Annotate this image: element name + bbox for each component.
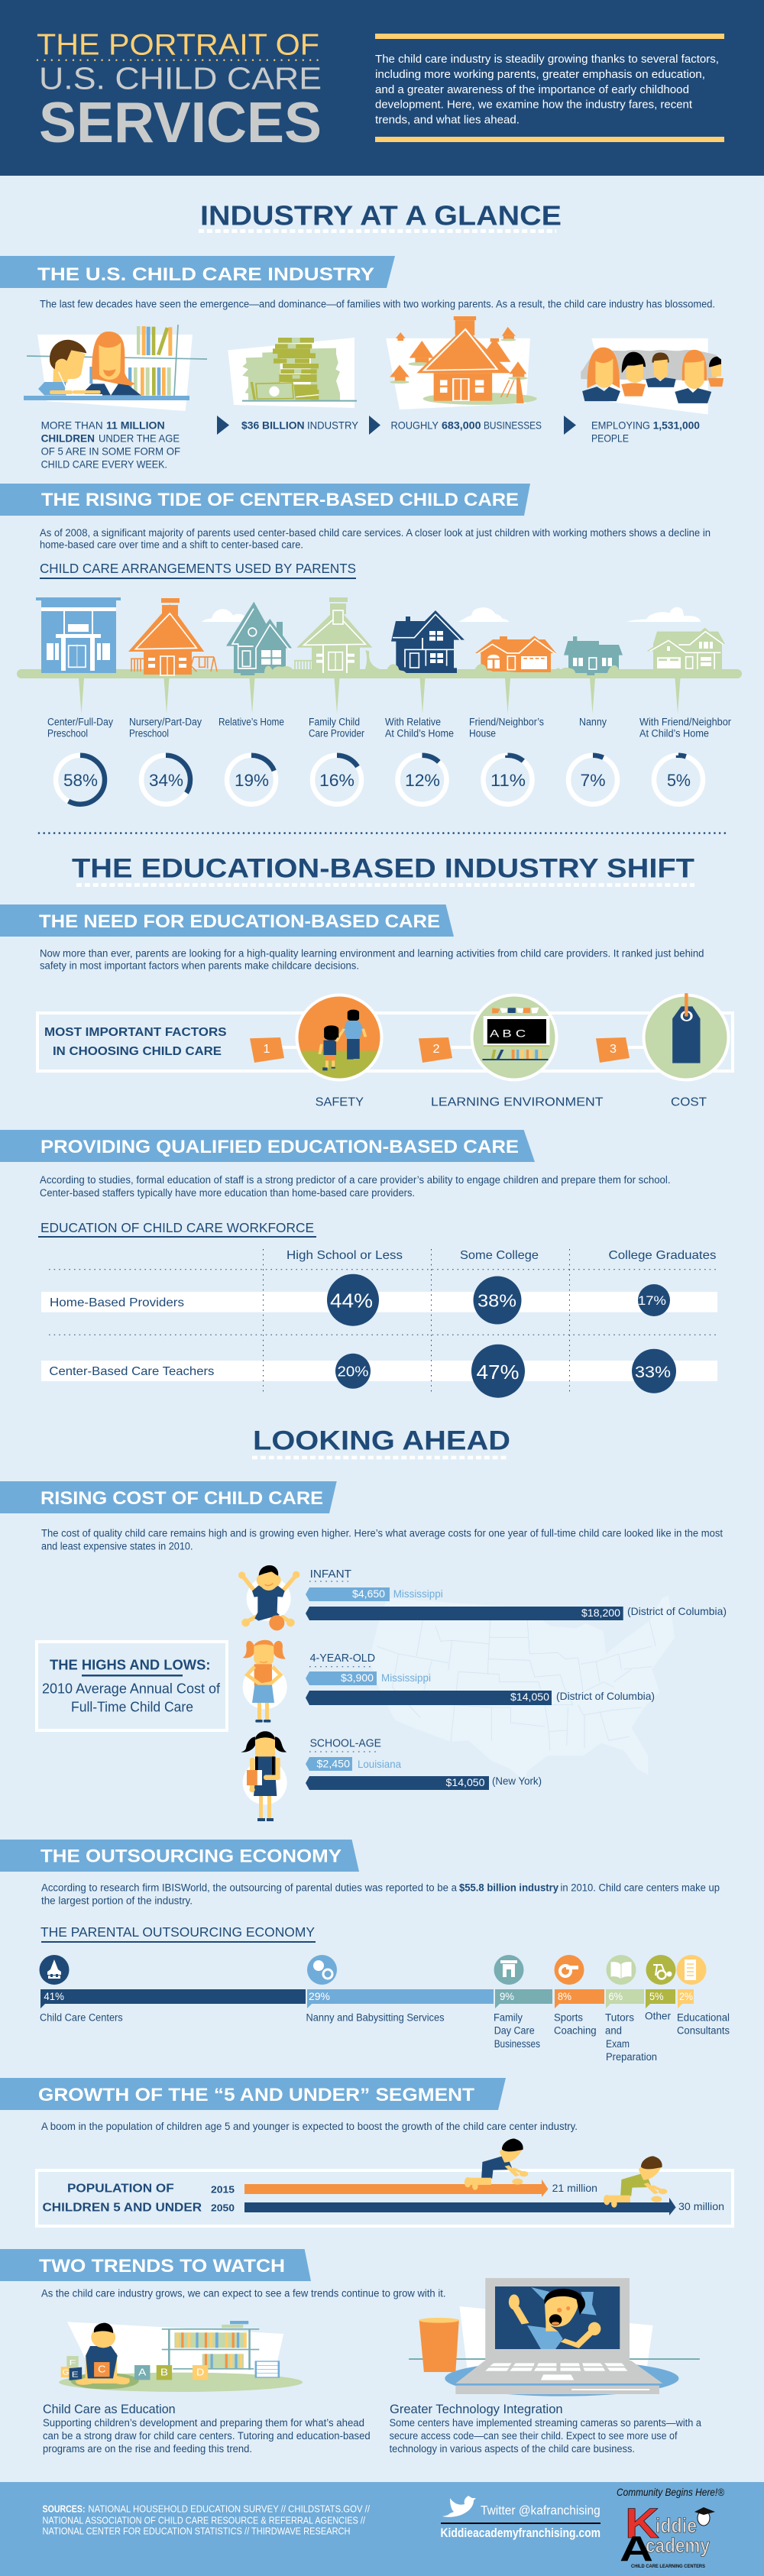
icon: pacifier	[307, 1955, 337, 1985]
illustration: child with blocks and shelf: B	[160, 2366, 168, 2377]
tag 1: 1	[263, 1043, 270, 1056]
segment labels: Consultants	[677, 2025, 730, 2037]
logo: Kiddie Academy: K	[625, 2499, 659, 2547]
arrow	[564, 416, 576, 435]
banner: the outsourcing economy: THE OUTSOURCING ECONOMY	[40, 1846, 342, 1867]
stat: 683,000 businesses	[391, 419, 542, 431]
column headers: High School or Less	[286, 1249, 403, 1262]
category labels: With Friend/Neighbor	[639, 717, 731, 727]
intro text: the largest portion of the industry.	[41, 1895, 193, 1907]
house: nursery	[128, 598, 217, 675]
chart: 4-year-old cost: (District of Columbia)	[556, 1690, 655, 1702]
segment values	[44, 1991, 693, 2002]
icon: four-year-old	[242, 1640, 287, 1723]
factor labels: LEARNING ENVIRONMENT	[431, 1096, 604, 1109]
intro text: According to studies, formal education of staff is a strong predictor of a care provider’s ability to engage children and prepare them for school.	[40, 1174, 671, 1186]
segment values: 29%	[309, 1991, 330, 2002]
banner: the outsourcing economy	[0, 1840, 359, 1872]
chart: infant cost: (District of Columbia)	[627, 1605, 727, 1617]
panel: most important factors	[37, 993, 733, 1089]
bubble values: 47%	[477, 1361, 520, 1383]
tag 2	[419, 1037, 452, 1063]
table: education of workforce	[41, 1249, 717, 1398]
ground	[17, 669, 742, 678]
segment labels: Day Care	[494, 2025, 535, 2037]
chart: 4-year-old cost: 4-YEAR-OLD	[310, 1652, 375, 1665]
illustration: child with blocks and shelf: G	[63, 2368, 70, 2377]
segment labels: Coaching	[554, 2025, 597, 2037]
segment labels: Nanny and Babysitting Services	[306, 2012, 445, 2024]
intro text: $55.8 billion industry	[459, 1882, 558, 1894]
stat: 36 billion industry	[241, 419, 359, 431]
tag 2: 2	[432, 1043, 440, 1056]
banner: two trends	[0, 2249, 311, 2281]
category icons	[40, 1955, 706, 1985]
icon: crawling child olive	[604, 2156, 667, 2208]
stat: 683,000 businesses: BUSINESSES	[484, 419, 542, 431]
segment values: 9%	[500, 1991, 514, 2002]
intro text: safety in most important factors when parents make childcare decisions.	[40, 960, 359, 972]
column headers: Some College	[460, 1249, 539, 1262]
stat: 1,531,000 people	[591, 419, 700, 445]
house: friend at child's home	[647, 628, 725, 669]
column headers: College Graduates	[608, 1249, 717, 1262]
section heading: industry at a glance: INDUSTRY AT A GLANCE	[200, 200, 562, 231]
house: with relative	[387, 610, 465, 673]
stat: 1,531,000 people: PEOPLE	[591, 432, 629, 445]
segment labels: Exam	[606, 2038, 630, 2050]
row labels	[49, 1296, 214, 1378]
banner: growth of 5 and under	[0, 2078, 506, 2110]
illustration: group of employees	[581, 338, 724, 415]
category labels: Preschool	[129, 727, 169, 739]
subheading: EDUCATION OF CHILD CARE WORKFORCE	[40, 1220, 314, 1235]
logo: Kiddie Academy	[617, 2486, 725, 2569]
callout: highs and lows	[37, 1642, 227, 1730]
sources: SOURCES:	[43, 2503, 86, 2515]
segment labels: Family	[494, 2012, 523, 2024]
icon: tricycle	[646, 1955, 675, 1985]
factor 2: learning environment: A B C	[490, 1027, 526, 1039]
intro text: A boom in the population of children age 5 and younger is expected to boost the growth of the child care center industry.	[41, 2121, 578, 2132]
bar 2015: 2015	[211, 2184, 235, 2196]
panel heading: IN CHOOSING CHILD CARE	[53, 1045, 222, 1058]
chart: school-age cost: $2,450	[316, 1757, 350, 1769]
house: center/preschool	[36, 597, 121, 673]
spikes	[79, 678, 680, 714]
illustration: child with blocks and shelf	[59, 2321, 303, 2392]
bar 2050: 2050	[211, 2202, 235, 2214]
factor labels	[316, 1096, 707, 1109]
segment labels	[40, 2011, 730, 2063]
percentages: 5%	[667, 771, 691, 790]
segment labels: Tutors	[605, 2012, 634, 2024]
panel: population chart	[37, 2138, 733, 2226]
trend: child care as education: Supporting children’s development and preparing them for what’s ahead	[43, 2417, 364, 2429]
category labels: Care Provider	[309, 727, 364, 739]
sources	[43, 2503, 370, 2537]
factor 1: safety	[250, 993, 384, 1082]
chart: school-age cost: SCHOOL-AGE	[310, 1737, 381, 1750]
bar 2050	[211, 2198, 724, 2215]
banner: the U.S. child care industry: THE U.S. CHILD CARE INDUSTRY	[37, 264, 374, 285]
category labels: Nursery/Part-Day	[129, 717, 202, 727]
stat: 1,531,000 people: EMPLOYING	[591, 419, 650, 431]
trend: child care as education: programs are on the rise and feeding this trend.	[43, 2443, 252, 2455]
trend: greater technology integration: Some centers have implemented streaming cameras so parents—with a	[390, 2417, 701, 2429]
intro text block: development. Here, we examine how the industry fares, recent	[375, 98, 693, 112]
contact links	[440, 2503, 601, 2540]
icon: day care building	[494, 1955, 524, 1985]
header panel	[0, 0, 764, 176]
chart: infant cost	[306, 1568, 727, 1620]
category labels: Relative’s Home	[219, 717, 284, 727]
icon: school-age child	[241, 1731, 287, 1818]
factor labels: COST	[671, 1096, 707, 1109]
intro text	[40, 948, 704, 972]
bar segments	[40, 1989, 694, 2008]
tag 3: 3	[610, 1043, 617, 1056]
intro text	[40, 1174, 671, 1199]
banner: the need for education-based care: THE NEED FOR EDUCATION-BASED CARE	[39, 911, 440, 932]
illustration: child with blocks and shelf: F	[70, 2359, 76, 2367]
category labels: Family Child	[309, 717, 360, 727]
intro text: According to research firm IBISWorld, the outsourcing of parental duties was reported to be a	[41, 1882, 457, 1894]
intro text block	[375, 34, 724, 142]
intro text: As the child care industry grows, we can expect to see a few trends continue to grow with it.	[41, 2288, 446, 2299]
logo: Kiddie Academy: Community Begins Here!®	[617, 2486, 725, 2498]
banner: providing qualified care	[0, 1130, 535, 1162]
intro text block: and a greater awareness of the importance of early childhood	[375, 83, 689, 96]
factor 3: cost	[596, 993, 730, 1082]
banner: rising cost: RISING COST OF CHILD CARE	[40, 1488, 323, 1509]
banner: rising cost	[0, 1481, 337, 1513]
sources: NATIONAL CENTER FOR EDUCATION STATISTICS // THIRDWAVE RESEARCH	[43, 2526, 350, 2537]
percentages: 19%	[235, 771, 269, 790]
house: family provider	[294, 597, 382, 673]
stat: 11 million children: MORE THAN	[41, 419, 103, 431]
chart: school-age cost: (New York)	[492, 1775, 542, 1787]
callout: highs and lows: 2010 Average Annual Cost of	[42, 1681, 221, 1697]
segment labels: Educational	[677, 2012, 730, 2024]
stat: 11 million children: OF 5 ARE IN SOME FORM OF	[41, 445, 180, 457]
chart: infant cost: $4,650	[352, 1587, 385, 1600]
category labels: At Child’s Home	[639, 727, 709, 739]
segment values: 6%	[608, 1991, 623, 2002]
title: THE PORTRAIT OF	[37, 29, 319, 61]
intro text: The last few decades have seen the emergence—and dominance—of families with two working parents. As a result, the child care industry has blossomed.	[40, 298, 715, 310]
bubble values: 17%	[638, 1294, 666, 1308]
bubble values: 20%	[338, 1364, 368, 1380]
donut charts	[56, 756, 703, 804]
shoes of school-age child	[257, 1818, 274, 1821]
illustration: child with blocks and shelf: E	[72, 2371, 79, 2379]
percentages: 34%	[149, 771, 183, 790]
category labels: Nanny	[579, 717, 607, 727]
stat: 36 billion industry: INDUSTRY	[307, 419, 359, 431]
stat: 683,000 businesses: ROUGHLY	[391, 419, 439, 431]
intro text: Now more than ever, parents are looking for a high-quality learning environment and learning activities from child care providers. It ranked just behind	[40, 948, 704, 960]
banner: the rising tide: THE RISING TIDE OF CENTER-BASED CHILD CARE	[41, 490, 519, 510]
bar 2015: 21 million	[552, 2182, 597, 2194]
intro text	[40, 527, 711, 550]
illustration: child with blocks and shelf: C	[98, 2363, 105, 2374]
houses left	[36, 597, 382, 675]
house: relative's home	[226, 602, 294, 675]
bubble values: 33%	[635, 1364, 671, 1381]
segment labels: and	[605, 2025, 622, 2037]
chart: parental outsourcing economy	[40, 1955, 730, 2063]
sources: NATIONAL ASSOCIATION OF CHILD CARE RESOURCE & REFERRAL AGENCIES //	[43, 2515, 365, 2526]
segment values: 41%	[44, 1991, 64, 2002]
intro text	[41, 1528, 723, 1552]
map: United States background	[369, 1595, 675, 1782]
intro text: As of 2008, a significant majority of parents used center-based child care services. A closer look at just children with working mothers shows a decline in	[40, 527, 711, 539]
percentages: 58%	[63, 771, 98, 790]
category labels: With Relative	[385, 717, 441, 727]
arrow	[217, 416, 229, 435]
illustration: child with blocks and shelf: A	[138, 2366, 147, 2377]
stat: 11 million children: 11 MILLION	[106, 419, 165, 431]
banner: the need for education-based care	[0, 905, 454, 937]
intro text	[41, 1882, 720, 1907]
category labels: Preschool	[47, 727, 88, 739]
subheading: CHILD CARE ARRANGEMENTS USED BY PARENTS	[40, 561, 356, 576]
panel heading: POPULATION OF	[67, 2182, 174, 2195]
percentages: 7%	[581, 771, 605, 790]
logo: Kiddie Academy: iddie	[656, 2514, 697, 2537]
trend: child care as education: can be a strong draw for child care centers. Tutoring and education-based	[43, 2430, 371, 2442]
category labels: Friend/Neighbor’s	[469, 717, 544, 727]
section heading: education-based shift: THE EDUCATION-BASED INDUSTRY SHIFT	[72, 854, 694, 883]
illustration: stacks of money	[228, 338, 357, 408]
column headers	[286, 1249, 717, 1262]
logo: Kiddie Academy: CHILD CARE LEARNING CENTERS	[631, 2564, 706, 2569]
panel heading	[44, 1026, 227, 1058]
subheading: THE PARENTAL OUTSOURCING ECONOMY	[40, 1924, 315, 1940]
tag 3	[596, 1037, 630, 1063]
logo: Kiddie Academy: A	[620, 2529, 653, 2568]
illustration: child with blocks and shelf: D	[196, 2366, 204, 2377]
contact links: Kiddieacademyfranchising.com	[440, 2526, 601, 2540]
title	[37, 29, 322, 154]
chart: 4-year-old cost: $3,900	[341, 1671, 374, 1684]
callout: highs and lows: THE HIGHS AND LOWS:	[50, 1658, 211, 1673]
stat: 11 million children	[41, 419, 180, 471]
panel heading: MOST IMPORTANT FACTORS	[44, 1026, 227, 1039]
intro text: in 2010. Child care centers make up	[561, 1882, 720, 1894]
chart: 4-year-old cost: $14,050	[510, 1691, 549, 1703]
logo: Kiddie Academy: cademy	[646, 2534, 710, 2557]
bubbles	[327, 1274, 676, 1398]
arrow	[369, 416, 380, 435]
banner: two trends: TWO TRENDS TO WATCH	[39, 2256, 285, 2277]
row labels: Center-Based Care Teachers	[49, 1365, 214, 1378]
intro text: and least expensive states in 2010.	[41, 1541, 193, 1552]
icon: infant	[238, 1565, 299, 1630]
icon: consultant paper	[677, 1955, 706, 1985]
intro text block: The child care industry is steadily growing thanks to several factors,	[375, 53, 719, 66]
factor 2: learning environment	[419, 993, 558, 1082]
section heading: looking ahead: LOOKING AHEAD	[253, 1426, 510, 1456]
stat: 11 million children: CHILDREN	[41, 432, 95, 445]
contact links: Twitter @kafranchising	[481, 2503, 601, 2518]
banner: the U.S. child care industry	[0, 256, 395, 288]
stat: 11 million children: UNDER THE AGE	[99, 432, 180, 445]
chart: 4-year-old cost	[306, 1652, 655, 1705]
trend: child care as education: Child Care as Education	[43, 2402, 176, 2416]
icon: child care centers	[40, 1955, 69, 1985]
chart: school-age cost: Louisiana	[358, 1758, 401, 1770]
icon: whistle	[555, 1955, 584, 1985]
clouds	[202, 607, 701, 622]
percentages	[63, 771, 691, 790]
intro text block: trends, and what lies ahead.	[375, 113, 520, 127]
stat: 36 billion industry: $36 BILLION	[241, 419, 305, 431]
illustration: laptop with streaming child	[409, 2278, 700, 2396]
stat: 1,531,000 people: 1,531,000	[653, 419, 700, 431]
icon: twitter bird	[442, 2496, 476, 2517]
icon: book	[607, 1955, 636, 1985]
category labels	[47, 717, 731, 739]
chart: infant cost: INFANT	[310, 1568, 351, 1581]
house: friend's	[474, 636, 556, 673]
segment values: 8%	[558, 1991, 571, 2002]
segment labels: Child Care Centers	[40, 2012, 123, 2024]
bubble values: 44%	[330, 1290, 373, 1312]
banner: growth of 5 and under: GROWTH OF THE “5 AND UNDER” SEGMENT	[38, 2085, 474, 2105]
bubble values: 38%	[478, 1291, 516, 1311]
chart: school-age cost: $14,050	[446, 1776, 485, 1788]
intro text: Center-based staffers typically have more education than home-based care providers.	[40, 1187, 415, 1199]
trend: greater technology integration: Greater Technology Integration	[390, 2402, 563, 2416]
segment values: 5%	[649, 1991, 664, 2002]
intro text: The cost of quality child care remains high and is growing even higher. Here’s what average costs for one year of full-time child care looked like in the most	[41, 1528, 723, 1539]
banner: the rising tide	[0, 484, 530, 516]
intro text block: including more working parents, greater emphasis on education,	[375, 68, 705, 81]
intro text: home-based care over time and a shift to center-based care.	[40, 539, 303, 550]
footer panel	[0, 2482, 764, 2576]
illustration: big orange house	[386, 316, 537, 409]
segment labels: Preparation	[606, 2051, 657, 2063]
percentages: 16%	[319, 771, 354, 790]
bar 2050: 30 million	[678, 2200, 724, 2212]
category labels: At Child’s Home	[385, 727, 454, 739]
percentages: 11%	[490, 771, 526, 790]
category labels: House	[469, 727, 496, 739]
title: U.S. CHILD CARE	[39, 61, 322, 96]
chart: 4-year-old cost: Mississippi	[381, 1671, 431, 1684]
factor labels: SAFETY	[316, 1096, 364, 1109]
houses right	[387, 610, 725, 675]
trend: child care as education	[43, 2402, 371, 2455]
bubble values	[330, 1290, 671, 1383]
callout: highs and lows: Full-Time Child Care	[71, 1700, 193, 1715]
segment values: 2%	[679, 1991, 693, 2002]
trend: greater technology integration	[390, 2402, 701, 2455]
stat: 683,000 businesses: 683,000	[442, 419, 481, 431]
tag 1	[250, 1037, 284, 1063]
chart: infant cost: $18,200	[581, 1607, 620, 1619]
percentages: 12%	[405, 771, 440, 790]
row labels: Home-Based Providers	[50, 1296, 184, 1309]
sources: NATIONAL HOUSEHOLD EDUCATION SURVEY // CHILDSTATS.GOV //	[88, 2503, 370, 2515]
trend: greater technology integration: technology in various aspects of the child care business.	[390, 2443, 635, 2455]
segment labels: Sports	[554, 2012, 583, 2024]
category labels: Center/Full-Day	[47, 717, 113, 727]
banner: providing qualified care: PROVIDING QUALIFIED EDUCATION-BASED CARE	[40, 1137, 519, 1157]
segment labels: Other	[645, 2011, 672, 2022]
title: SERVICES	[39, 90, 322, 154]
trend: greater technology integration: secure access code—can see their child. Expect to see more use of	[390, 2430, 678, 2442]
segment labels: Businesses	[494, 2038, 540, 2050]
bar 2015	[211, 2180, 597, 2197]
stat: 11 million children: CHILD CARE EVERY WEEK.	[41, 458, 167, 471]
panel heading: CHILDREN 5 AND UNDER	[43, 2202, 202, 2215]
panel heading	[43, 2182, 202, 2215]
illustration: parent and child reading at shelf	[24, 325, 207, 411]
chart: school-age cost	[306, 1737, 542, 1790]
house: nanny	[555, 636, 623, 675]
chart: child care arrangements	[17, 597, 742, 804]
chart: infant cost: Mississippi	[393, 1587, 443, 1600]
icon: crawling child navy	[465, 2138, 528, 2190]
